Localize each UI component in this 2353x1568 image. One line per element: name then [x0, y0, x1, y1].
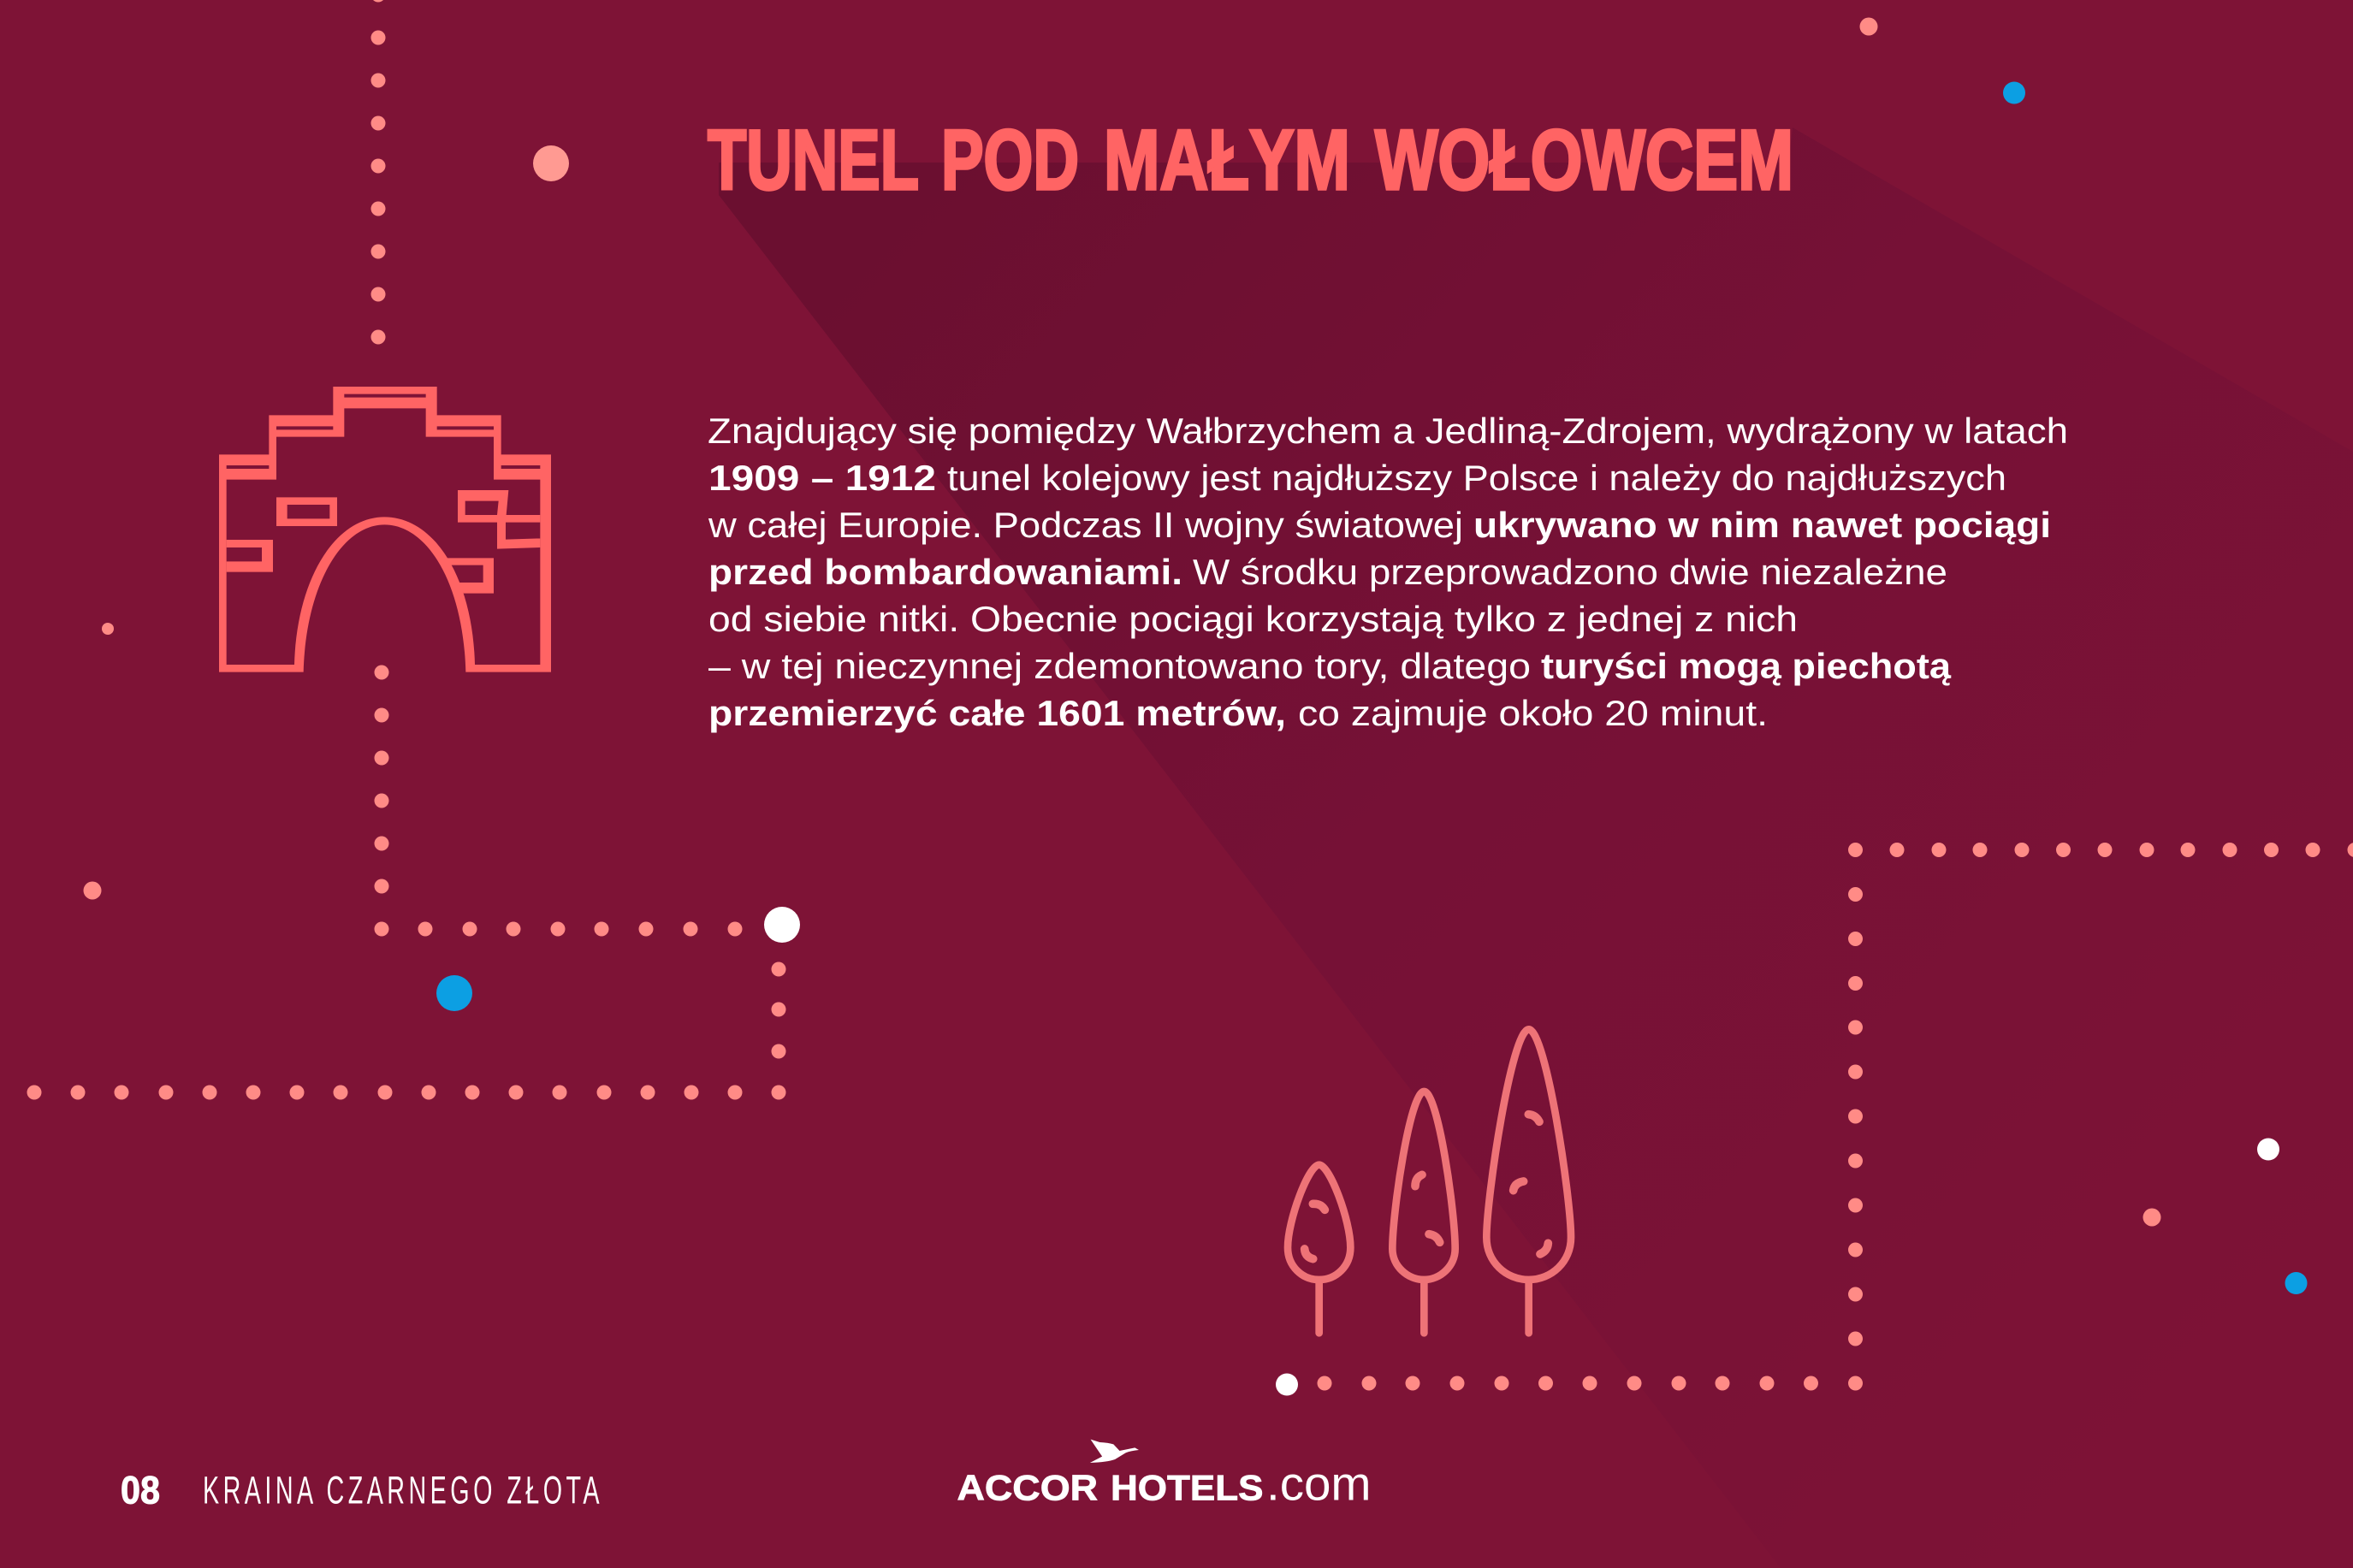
logo: AccorHotels.com: .com — [1266, 1456, 1371, 1511]
section name: KRAINA CZARNEGO ZŁOTA — [203, 1468, 603, 1512]
dotted path: right frame — [1318, 843, 2353, 1391]
long shadow behind the title — [719, 127, 2353, 1568]
scattered accent dots — [84, 17, 2307, 1294]
body text: tunel kolejowy jest najdłuższy Polsce i należy do najdłuższych — [947, 458, 2006, 498]
accent dot: white junction — [764, 907, 800, 943]
body text: w całej Europie. Podczas II wojny światowej — [708, 505, 1463, 545]
body text: 1909 – 1912 — [708, 458, 936, 498]
title: TUNEL — [708, 112, 919, 207]
logo: AccorHotels.com: HOTELS — [1111, 1468, 1263, 1507]
page number: 08 — [121, 1468, 160, 1512]
title: WOŁOWCEM — [1375, 112, 1793, 207]
accent dot: white tree-row start — [1276, 1374, 1298, 1396]
title: POD — [941, 112, 1079, 207]
icon: bird — [1090, 1440, 1139, 1463]
body text: przed bombardowaniami. — [708, 552, 1182, 592]
body text: – w tej nieczynnej zdemontowano tory, dlatego — [708, 646, 1531, 686]
dotted path: top left column — [371, 0, 385, 344]
body text: W środku przeprowadzono dwie niezależne — [1193, 552, 1947, 592]
body text: od siebie nitki. Obecnie pociągi korzystają tylko z jednej z nich — [708, 599, 1798, 639]
icon: tunnel portal — [219, 387, 551, 672]
dotted path: below the tunnel — [27, 666, 785, 1100]
title: MAŁYM — [1104, 112, 1350, 207]
body text: przemierzyć całe 1601 metrów, — [708, 693, 1286, 733]
logo: AccorHotels.com — [957, 1440, 1371, 1511]
body text — [708, 411, 2068, 733]
icon: three trees — [1288, 1029, 1571, 1333]
body text: ukrywano w nim nawet pociągi — [1473, 505, 2051, 545]
body text: turyści mogą piechotą — [1541, 646, 1952, 686]
body text: Znajdujący się pomiędzy Wałbrzychem a Jedliną-Zdrojem, wydrążony w latach — [708, 411, 2068, 451]
body text: co zajmuje około 20 minut. — [1298, 693, 1768, 733]
title — [708, 112, 1793, 207]
logo: AccorHotels.com: ACCOR — [957, 1468, 1098, 1507]
